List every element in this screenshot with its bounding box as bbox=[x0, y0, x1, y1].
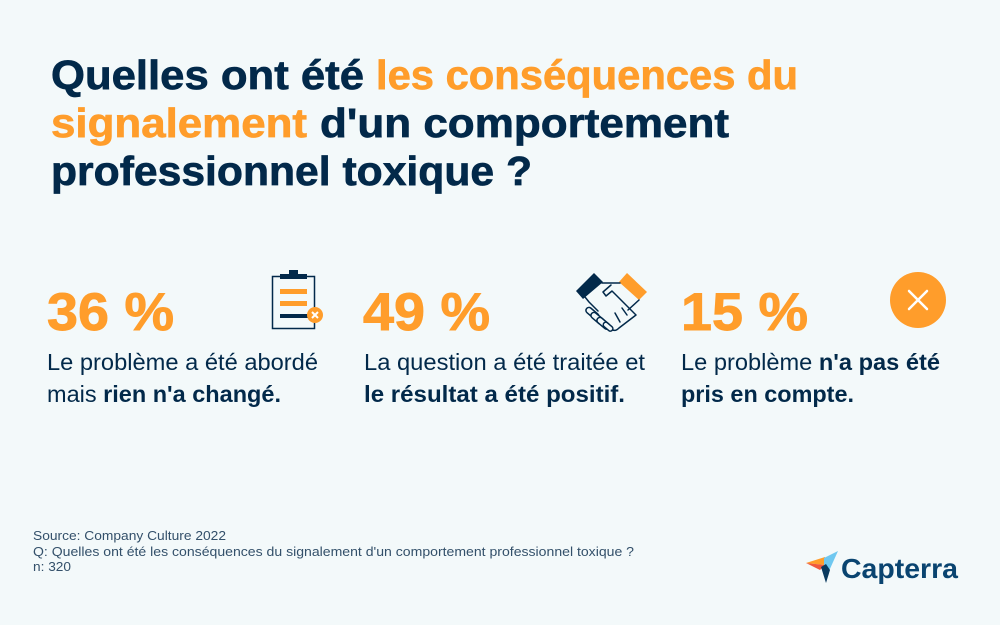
text: résultat positif bbox=[364, 349, 645, 407]
icon: Capterra arrow bbox=[806, 551, 838, 583]
icon: clipboard bbox=[272, 270, 323, 328]
panel: 49 % bbox=[363, 273, 647, 407]
stat: 15 %: 15 % bbox=[681, 283, 808, 342]
title: signalement bbox=[51, 100, 307, 146]
panel: 36 % bbox=[47, 270, 323, 407]
logo: Capterra: Capterra bbox=[841, 553, 958, 584]
text: pas pris en compte: Le problème n'a pas été bbox=[681, 349, 940, 375]
title: d'un comportement bbox=[320, 100, 729, 146]
source note: Q: Quelles ont été les conséquences du signalement d'un comportement professionnel toxique ? bbox=[33, 544, 634, 559]
source note: Source: Company Culture 2022 bbox=[33, 528, 226, 543]
title: professionnel toxique ? bbox=[51, 148, 532, 194]
text: rien n'a changé: Le problème a été abordé bbox=[47, 349, 318, 375]
text: pas pris en compte: pris en compte. bbox=[681, 381, 854, 407]
source note: n: 320 bbox=[33, 559, 71, 574]
text: résultat positif: le résultat a été positif. bbox=[364, 381, 625, 407]
text: pas pris en compte bbox=[681, 349, 940, 407]
icon: handshake bbox=[576, 273, 647, 332]
title: les conséquences du bbox=[376, 52, 798, 98]
stat: 36 %: 36 % bbox=[47, 283, 174, 342]
title bbox=[51, 52, 798, 194]
source note bbox=[33, 528, 634, 574]
text: rien n'a changé: mais rien n'a changé. bbox=[47, 381, 281, 407]
title: Quelles ont été bbox=[51, 52, 364, 98]
text: résultat positif: La question a été traitée et bbox=[364, 349, 645, 375]
panel: 15 % bbox=[681, 272, 946, 407]
text: rien n'a changé bbox=[47, 349, 318, 407]
icon: cross in circle bbox=[890, 272, 946, 328]
stat: 49 %: 49 % bbox=[363, 283, 490, 342]
